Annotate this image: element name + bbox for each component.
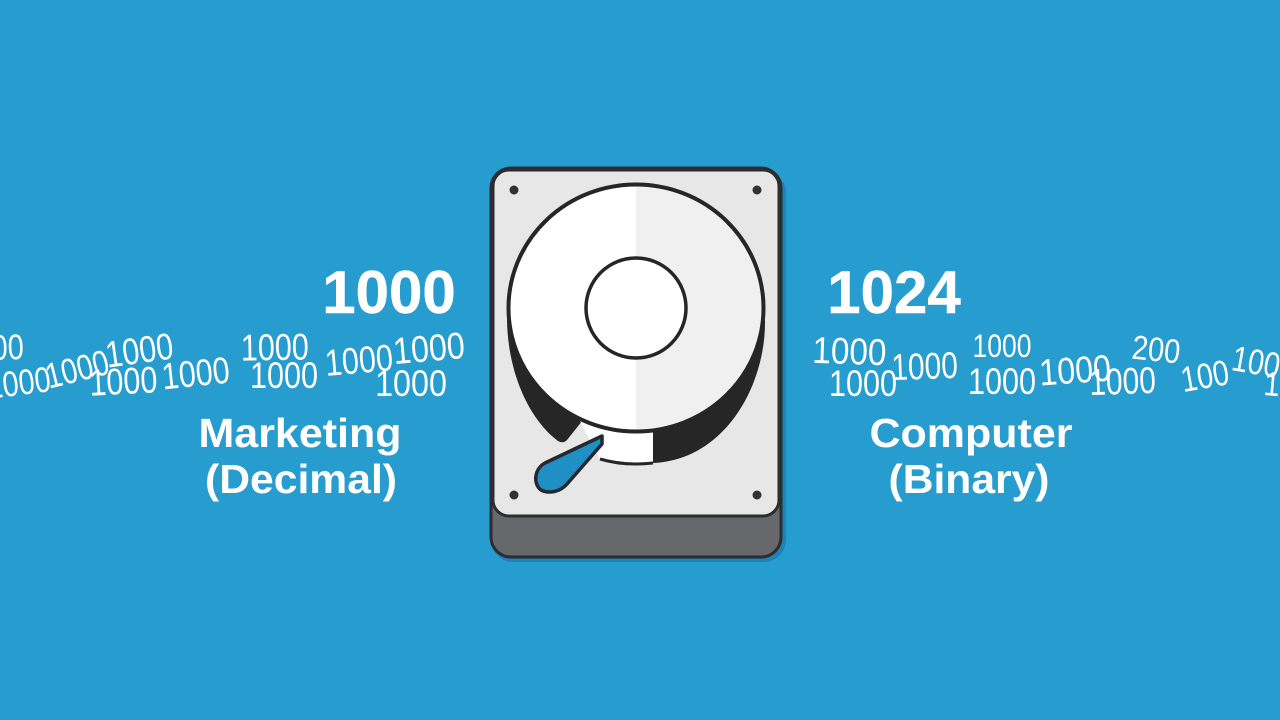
disc hub [586,258,686,358]
number 1000 heading: 1000 [322,259,456,326]
number 1024 heading: 1024 [827,259,961,326]
label: computer binary: (Binary) [888,456,1050,502]
actuator arm [536,436,602,492]
left stream of 1000 numbers: 1000 [240,327,309,369]
left stream of 1000 numbers: 1000 [41,342,113,396]
label: computer binary [870,410,1073,502]
label: marketing decimal [198,410,402,502]
left stream of 1000 numbers: 1000 [391,325,467,373]
mounting screws [510,186,762,500]
left stream of 1000 numbers [0,325,467,407]
label: marketing decimal: (Decimal) [205,456,397,502]
right stream of 1000 numbers [812,327,1280,407]
label: computer binary: Computer [870,410,1073,456]
hard drive icon [491,168,786,562]
right stream of 1000 numbers: 1000 [812,329,887,374]
left stream of 1000 numbers: 1000 [160,350,232,398]
label: marketing decimal: Marketing [198,410,402,456]
left stream of 1000 numbers: 1000 [375,363,447,405]
right stream of 1000 numbers: 1000 [891,345,959,389]
disc platter [508,184,764,432]
drive base [491,168,781,557]
right stream of 1000 numbers: 1000 [1038,347,1112,394]
disc shadow crescent [507,320,765,464]
left stream of 1000 numbers: 1000 [88,359,158,405]
right stream of 1000 numbers: 200 [1130,327,1182,371]
left stream of 1000 numbers: 1000 [323,337,395,385]
drive top plate [493,170,779,516]
left stream of 1000 numbers: 1000 [250,355,318,397]
right stream of 1000 numbers: 1000 [1089,360,1157,404]
right stream of 1000 numbers: 1000 [968,361,1036,403]
right stream of 1000 numbers: 1000 [829,363,897,405]
right stream of 1000 numbers: 100 [1178,352,1232,400]
left stream of 1000 numbers: 1000 [103,326,176,376]
right stream of 1000 numbers: 1000 [973,329,1031,365]
